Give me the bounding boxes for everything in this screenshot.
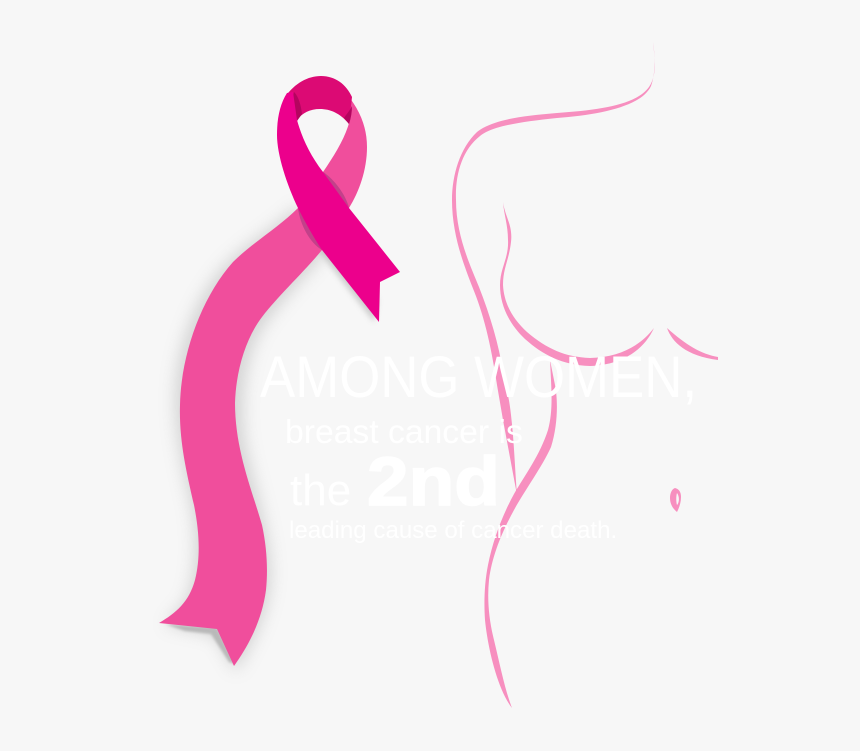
emphasis: 2nd: 2nd — [367, 443, 500, 520]
breast curve line — [500, 202, 654, 366]
icon: pink awareness ribbon — [159, 76, 400, 672]
line: the: the — [290, 466, 351, 515]
waist and hip line — [484, 360, 557, 708]
tail notch shadow — [165, 624, 235, 664]
illustration: female torso outline — [452, 42, 718, 708]
fold shadow lower — [298, 205, 330, 250]
line: leading cause of cancer death: leading cause of cancer death. — [289, 517, 617, 544]
loop inner shade left — [293, 92, 302, 121]
loop inner shade right — [344, 106, 352, 124]
shoulder and arm line — [452, 42, 655, 495]
text block: headline message — [260, 345, 697, 544]
right breast curve line — [667, 328, 718, 360]
navel — [670, 488, 681, 512]
ribbon loop top — [285, 76, 352, 124]
fold shadow upper — [318, 172, 349, 215]
shadow under front tail — [318, 240, 378, 322]
ribbon soft shadow — [165, 205, 326, 672]
heading: among women: AMONG WOMEN, — [260, 345, 697, 410]
line: breast cancer is: breast cancer is — [285, 413, 523, 451]
front ribbon band — [277, 92, 400, 322]
light ribbon band — [159, 90, 367, 666]
